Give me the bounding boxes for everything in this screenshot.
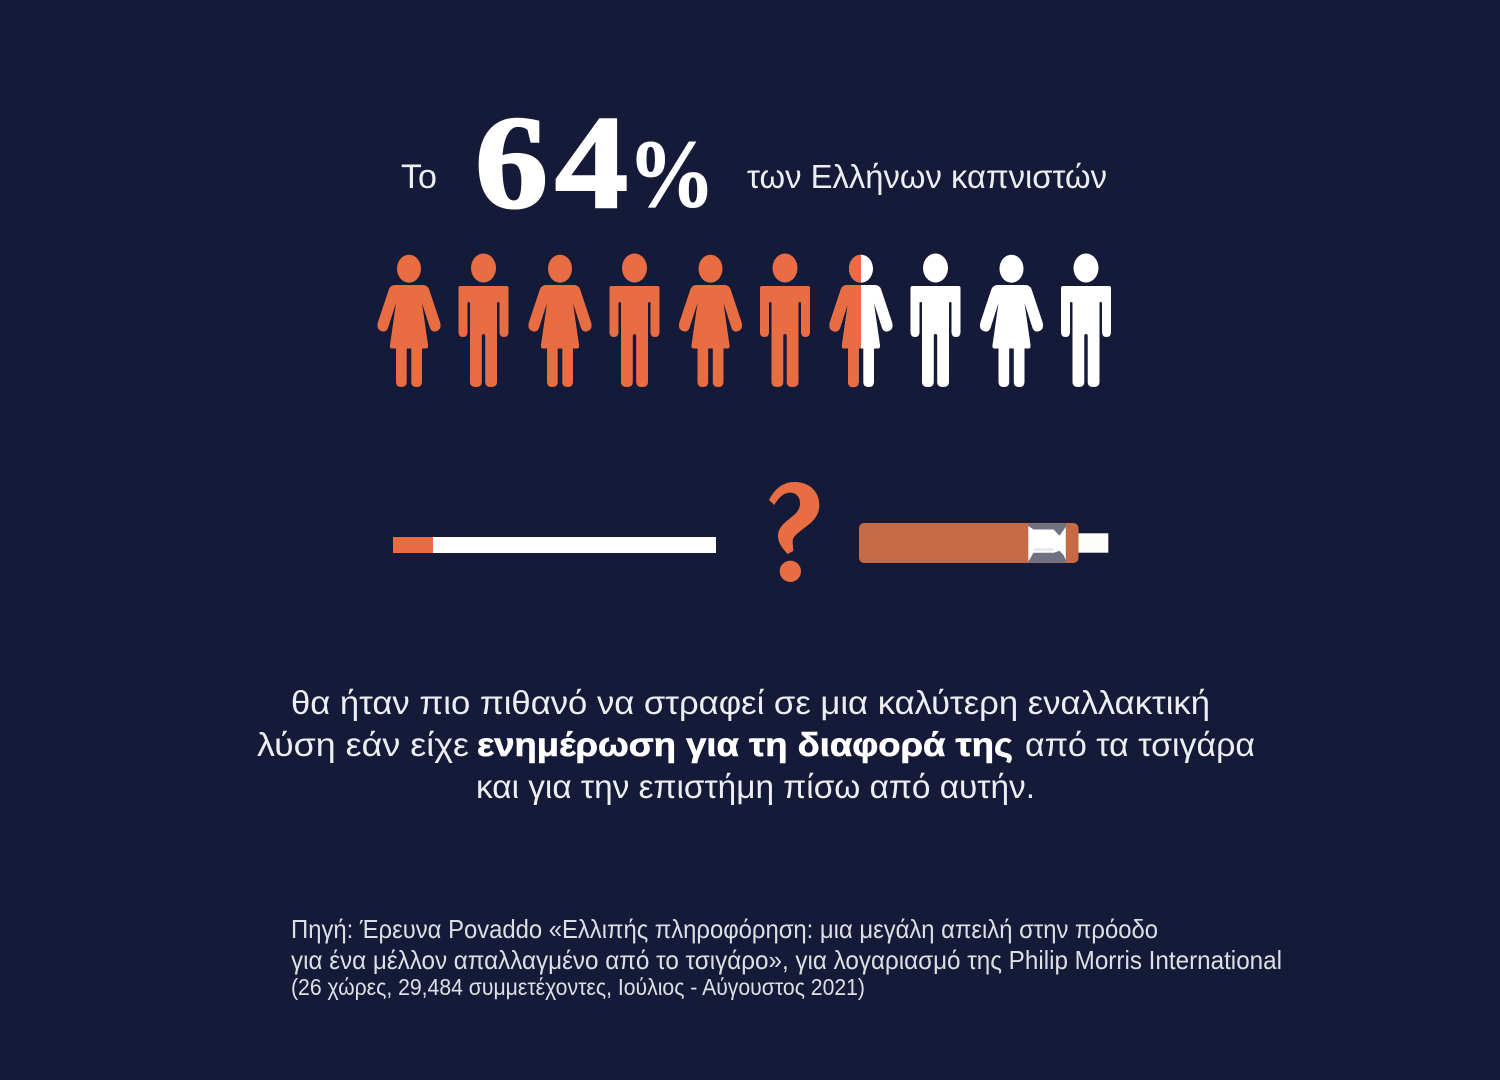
icon: man orange 2 — [458, 254, 508, 387]
text block: main statement: λύση εάν είχε — [257, 726, 469, 763]
text block: main statement: από τα τσιγάρα — [1025, 726, 1255, 763]
icon: woman orange 1 — [377, 255, 441, 387]
icon: question mark — [769, 482, 819, 582]
highlighted phrase: ενημέρωση για τη διαφορά της — [477, 726, 1013, 763]
icon: woman orange 5 — [679, 255, 742, 387]
text block: main statement — [257, 684, 1255, 805]
icon: man orange 6 — [760, 254, 810, 387]
icon: man white 10 — [1061, 254, 1111, 387]
title: 64 percent figure: 4 — [555, 88, 628, 236]
source note: Πηγή: Έρευνα Povaddo «Ελλιπής πληροφόρηση: μια μεγάλη απειλή στην πρόοδο — [291, 914, 1158, 944]
title: 64 percent figure: % — [628, 120, 715, 227]
source note: (26 χώρες, 29,484 συμμετέχοντες, Ιούλιος - Αύγουστος 2021) — [291, 974, 865, 1000]
title: 64 percent figure — [475, 88, 715, 236]
icon: man orange 4 — [610, 254, 660, 387]
text block: main statement: θα ήταν πιο πιθανό να στραφεί σε μια καλύτερη εναλλακτική — [291, 684, 1210, 721]
icon: woman orange 3 — [528, 255, 592, 387]
text block: main statement: και για την επιστήμη πίσω από αυτήν. — [476, 768, 1035, 805]
title: subject of the statistic: των Ελλήνων καπνιστών — [747, 158, 1107, 195]
source note: για ένα μέλλον απαλλαγμένο από το τσιγάρο», για λογαριασμό της Philip Morris International — [291, 945, 1282, 975]
icon: woman half orange half white — [829, 255, 893, 387]
icon: man white 8 — [910, 254, 960, 387]
title: 64 percent figure: 6 — [475, 88, 548, 236]
icon: woman white 9 — [980, 255, 1043, 387]
source note — [291, 914, 1282, 1000]
icon: cigarette — [393, 537, 716, 553]
pictogram row: 64 percent of ten figures — [377, 254, 1111, 387]
title: lead-in word: Το — [401, 158, 437, 196]
icon: heated tobacco device — [859, 523, 1108, 563]
